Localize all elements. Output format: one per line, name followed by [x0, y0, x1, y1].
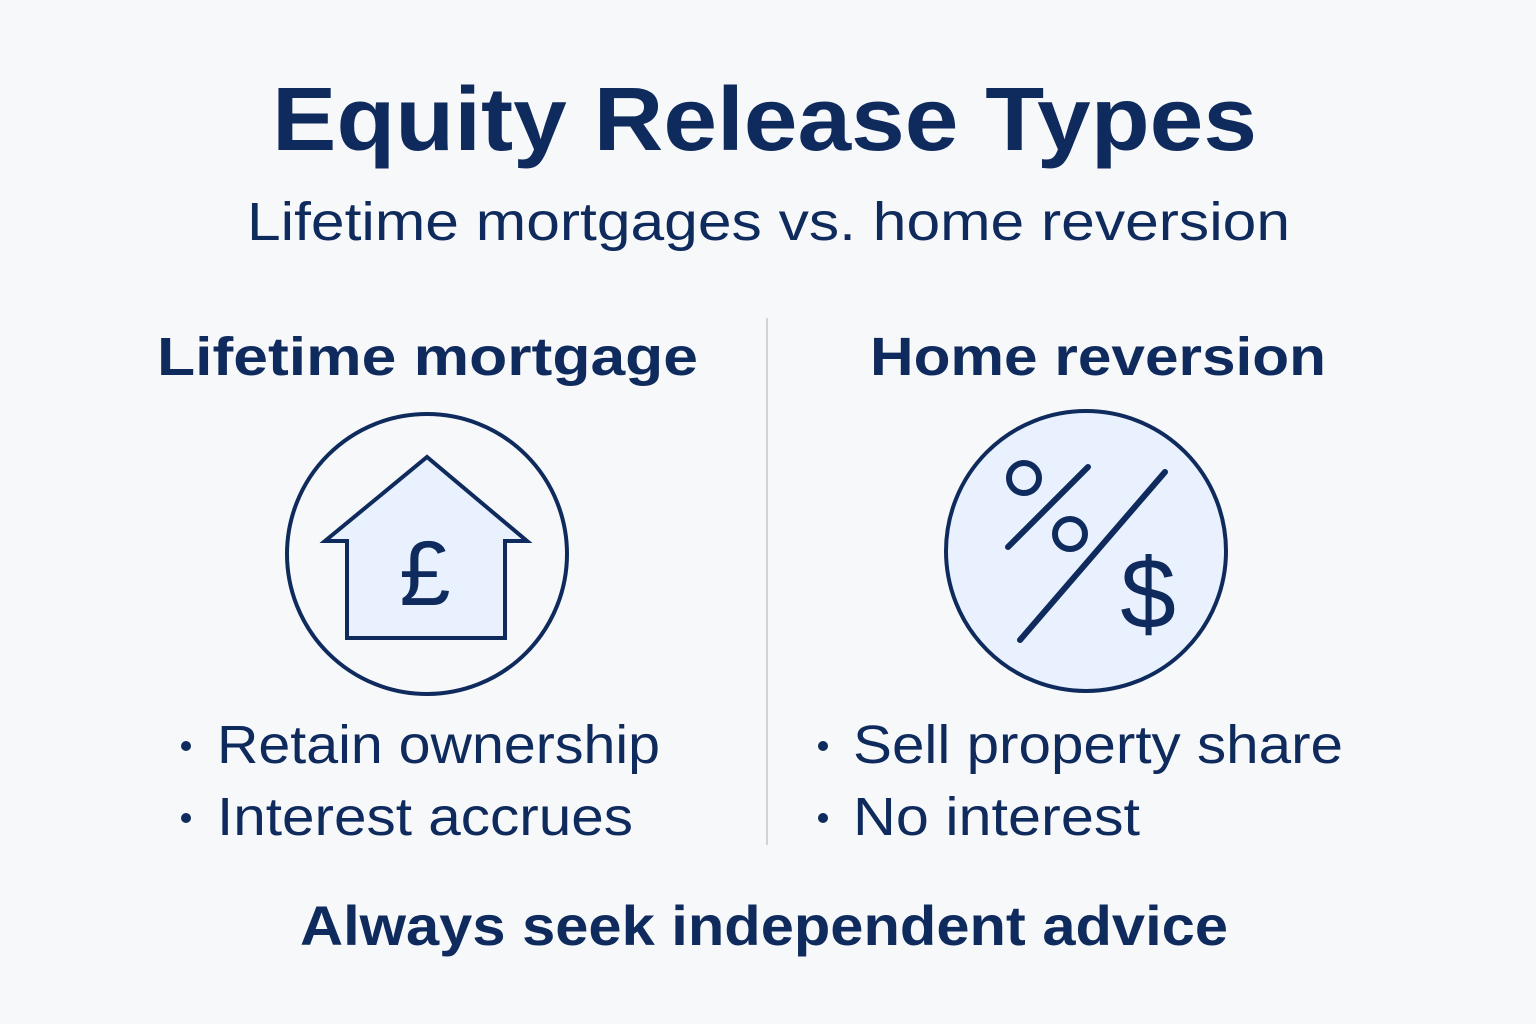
bullets: home reversion: Sell property share [853, 715, 1343, 775]
heading: home reversion: Home reversion [870, 327, 1326, 387]
title: Equity Release Types [272, 70, 1257, 170]
icon: percent and dollar [946, 411, 1226, 691]
bullets: lifetime mortgage: Retain ownership [217, 715, 660, 775]
bullets: lifetime mortgage: Interest accrues [217, 787, 633, 847]
bullets: lifetime mortgage [181, 715, 660, 847]
panel: home reversion [818, 327, 1343, 847]
subtitle: Lifetime mortgages vs. home reversion [247, 192, 1290, 252]
icon: house with pound: £ [399, 523, 451, 625]
heading: lifetime mortgage: Lifetime mortgage [157, 327, 698, 387]
icon: house with pound [287, 414, 567, 694]
bullets: home reversion [818, 715, 1343, 847]
icon: percent and dollar: $ [1120, 538, 1176, 650]
panel: lifetime mortgage [157, 327, 698, 847]
bullets: home reversion: No interest [853, 787, 1140, 847]
footer note: Always seek independent advice [300, 894, 1228, 957]
